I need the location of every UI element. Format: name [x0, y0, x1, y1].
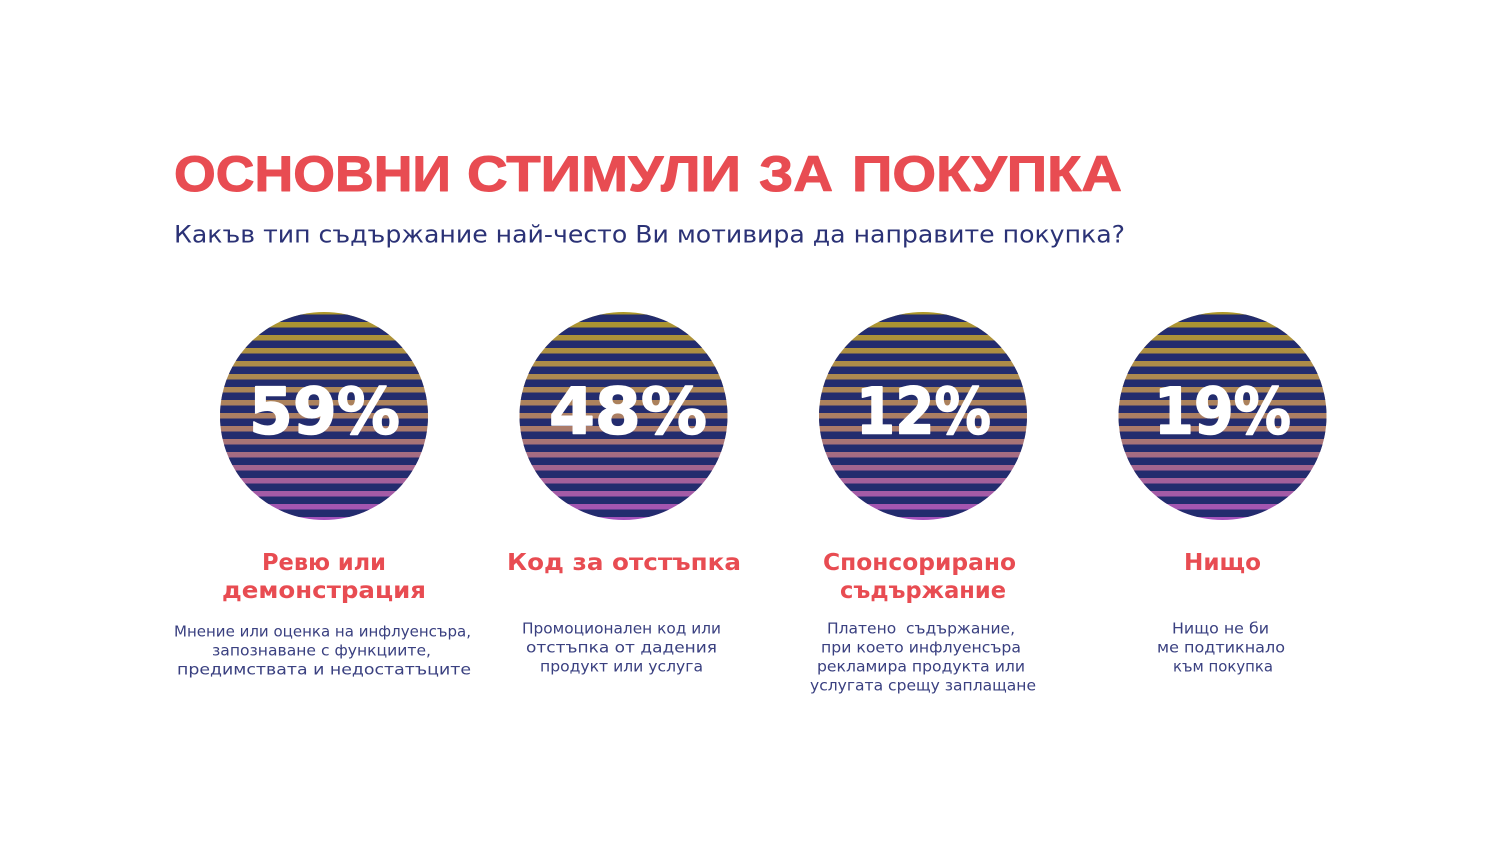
stat circle: 59%: 59%	[249, 376, 400, 450]
panel: discount code	[507, 312, 741, 676]
stat circle: 12%: 12%	[856, 376, 991, 450]
description: Платено съдържание,	[827, 620, 1015, 638]
description: Мнение или оценка на инфлуенсъра,	[174, 622, 471, 640]
stat circle: 48%	[514, 312, 734, 520]
title: ОСНОВНИ	[174, 146, 451, 202]
title: СТИМУЛИ	[467, 146, 741, 202]
description: при което инфлуенсъра	[821, 638, 1021, 656]
heading: съдържание	[840, 578, 1006, 604]
subtitle: Какъв тип съдържание най-често Ви мотивира да направите покупка?	[174, 220, 1125, 248]
description: към покупка	[1173, 658, 1273, 676]
stat circle: 19%	[1112, 312, 1332, 520]
heading: Ревю или	[262, 550, 386, 576]
stat circle: 48%: 48%	[549, 376, 707, 450]
description: предимствата и недостатъците	[177, 660, 471, 678]
stat circle: 59%	[214, 312, 434, 520]
description: отстъпка от дадения	[526, 638, 717, 656]
panel: review or demonstration	[174, 312, 471, 678]
description: услугата срещу заплащане	[810, 676, 1036, 694]
title: ЗА	[759, 146, 833, 202]
heading	[823, 550, 1016, 604]
description	[1157, 620, 1285, 676]
description: ме подтикнало	[1157, 638, 1285, 656]
stat circle: 12%	[813, 312, 1033, 520]
description: Промоционален код или	[522, 620, 721, 638]
heading	[222, 550, 426, 604]
description	[174, 622, 471, 678]
heading: Спонсорирано	[823, 550, 1016, 576]
title: ПОКУПКА	[852, 146, 1122, 202]
stat circle: 19%: 19%	[1154, 376, 1291, 450]
heading: Код за отстъпка	[507, 550, 741, 576]
heading: Нищо	[1184, 550, 1261, 576]
description: запознаване с функциите,	[212, 642, 431, 660]
description: продукт или услуга	[540, 658, 703, 676]
heading: демонстрация	[222, 578, 426, 604]
panel: nothing	[1112, 312, 1332, 676]
description: рекламира продукта или	[817, 658, 1025, 676]
title	[174, 146, 1122, 202]
description	[522, 620, 721, 676]
description	[810, 620, 1036, 694]
description: Нищо не би	[1172, 620, 1269, 638]
panel: sponsored content	[810, 312, 1036, 694]
